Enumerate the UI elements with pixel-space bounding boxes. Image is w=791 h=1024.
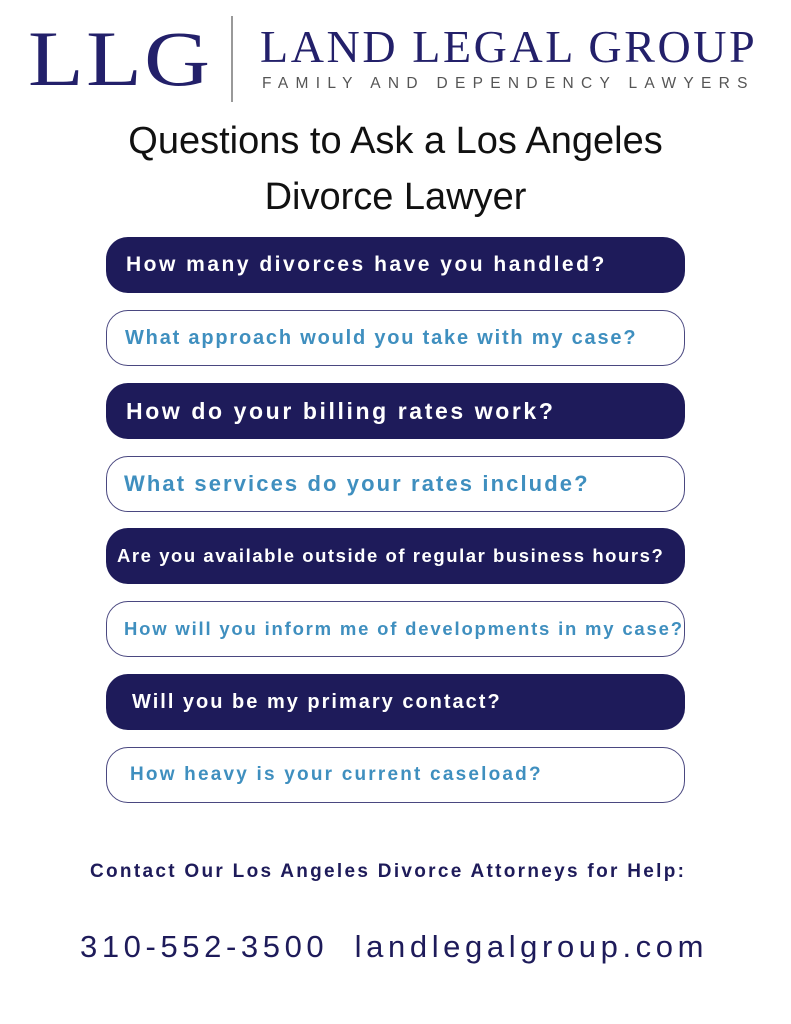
firm name: LAND LEGAL GROUP — [260, 21, 757, 72]
question 1: How many divorces have you handled? — [126, 253, 607, 276]
logo — [28, 15, 757, 102]
logo mark LLG: LLG — [28, 15, 212, 102]
tagline: FAMILY AND DEPENDENCY LAWYERS — [262, 75, 755, 92]
contact heading: Contact Our Los Angeles Divorce Attorneys for Help: — [90, 861, 686, 882]
question 3: How do your billing rates work? — [126, 398, 555, 424]
question 8: How heavy is your current caseload? — [130, 764, 543, 785]
question 4 — [106, 456, 685, 512]
question 6 — [106, 601, 685, 657]
question 2: What approach would you take with my case? — [125, 326, 637, 348]
question 5: Are you available outside of regular business hours? — [117, 545, 664, 566]
question 4: What services do your rates include? — [124, 471, 590, 496]
contact details: 310-552-3500 landlegalgroup.com — [80, 929, 708, 964]
question 2 — [106, 310, 685, 366]
question 8 — [106, 747, 685, 803]
question 1 — [106, 237, 685, 293]
question 7 — [106, 674, 685, 730]
title: Questions to Ask a Los Angeles — [128, 120, 663, 162]
question 5 — [106, 528, 685, 584]
question 6: How will you inform me of developments in my case? — [124, 618, 684, 639]
question 7: Will you be my primary contact? — [132, 690, 502, 712]
title: Divorce Lawyer — [265, 176, 526, 218]
title — [128, 120, 663, 218]
question 3 — [106, 383, 685, 439]
